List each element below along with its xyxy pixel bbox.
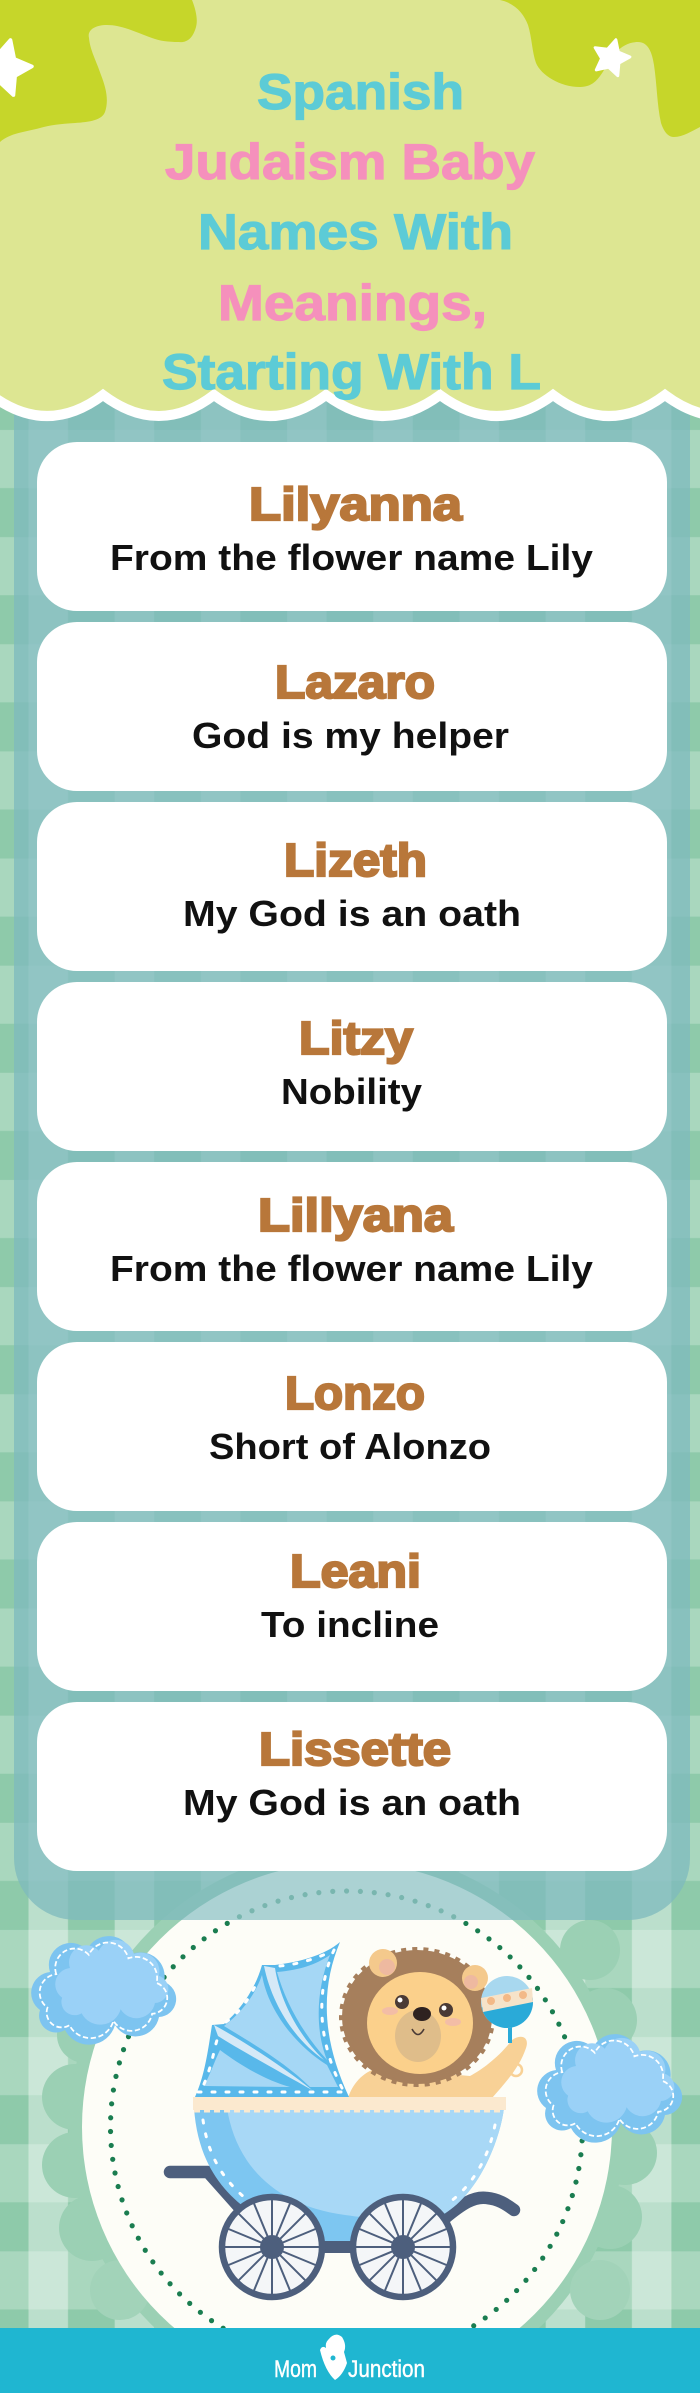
card: Lazaro [37,622,667,791]
card: Litzy: Nobility [281,1071,422,1112]
card: Lonzo: Lonzo [285,1367,425,1419]
left wheel [222,2197,322,2297]
card: Lazaro: Lazaro [275,656,435,708]
right cloud [537,2034,682,2143]
card: Lizeth: My God is an oath [183,893,521,934]
card: Lissette: Lissette [259,1723,451,1775]
card: Lillyana: From the flower name Lily [110,1248,593,1289]
card: Lonzo [37,1342,667,1511]
card: Litzy: Litzy [299,1012,413,1064]
top-left green blob [0,0,197,142]
card: Lissette [37,1702,667,1871]
scalloped green backdrop [42,1849,657,2393]
lion body and arm [348,2037,527,2098]
logo icon [320,2335,347,2380]
logo wordmark [274,2356,425,2383]
logo wordmark: Mom [274,2356,317,2383]
basket trim [193,2097,506,2110]
card: Lizeth: Lizeth [284,834,427,886]
title [162,64,541,400]
left cloud [31,1936,176,2045]
card: Lazaro: God is my helper [192,715,509,756]
white medallion circle [82,1862,612,2392]
lion mane [342,1950,492,2084]
stroller handles [170,2172,514,2218]
title: Names With [198,204,513,260]
card: Lilyanna: Lilyanna [249,478,462,530]
card: Lissette: My God is an oath [183,1782,521,1823]
title: Starting With L [162,344,541,400]
card: Lilyanna [37,442,667,611]
card: Lillyana: Lillyana [258,1189,453,1241]
axle [320,2241,360,2253]
scalloped header background [0,0,700,416]
rattle ring on the hand [510,2064,522,2076]
MomJunction logo [274,2335,425,2383]
card: Leani: Leani [290,1545,421,1597]
card: Litzy [37,982,667,1151]
dotted ring [110,1891,582,2363]
stroller hood [195,1942,349,2097]
footer bar [0,2328,700,2393]
title: Spanish [257,64,464,120]
card: Lizeth [37,802,667,971]
right wheel [353,2197,453,2297]
lion face [367,1972,473,2074]
left star [0,33,37,98]
medallion glimpse through the panel [180,1862,514,1921]
top-right green blob [500,0,700,137]
rattle toy [481,1976,538,2043]
card: Lonzo: Short of Alonzo [209,1426,491,1467]
right star [590,35,633,78]
stroller basket [194,2108,504,2247]
card: Leani [37,1522,667,1691]
title: Judaism Baby [165,134,535,190]
stroller [170,1942,514,2297]
lion in the stroller [342,1949,538,2098]
title: Meanings, [218,275,487,331]
card: Lilyanna: From the flower name Lily [110,537,593,578]
card: Lillyana [37,1162,667,1331]
logo wordmark: Junction [348,2356,425,2383]
lion ears [369,1949,488,1991]
header banner [0,0,700,416]
teal panel behind the name cards [14,300,690,1920]
card: Leani: To incline [261,1604,439,1645]
